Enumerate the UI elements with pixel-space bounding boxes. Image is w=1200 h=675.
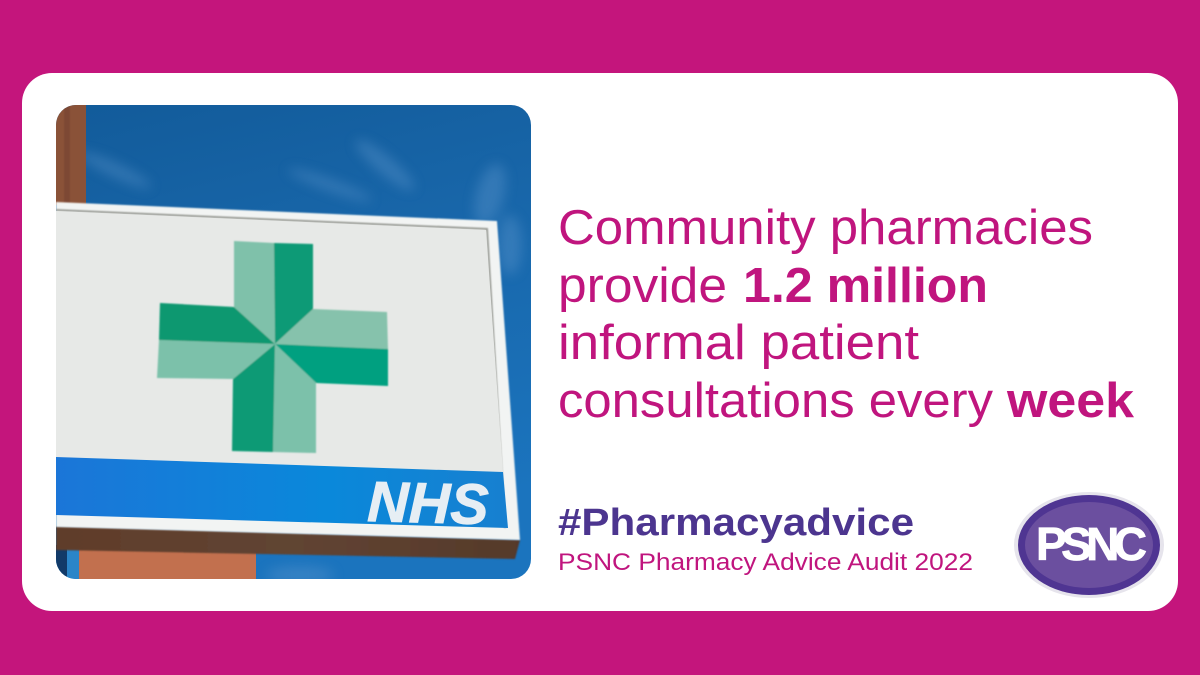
green cross <box>157 241 388 453</box>
headline: 1.2 million <box>743 259 988 313</box>
sign face <box>56 211 503 472</box>
brick wall top <box>56 105 86 205</box>
photo: NHS pharmacy sign <box>56 105 531 584</box>
headline <box>558 201 1135 428</box>
headline: week <box>1006 374 1135 428</box>
source line: PSNC Pharmacy Advice Audit 2022 <box>558 549 973 576</box>
headline: informal patient <box>558 316 919 370</box>
headline: provide <box>558 259 727 313</box>
sky <box>56 105 531 579</box>
sign underside <box>56 526 520 559</box>
lower left sky <box>56 550 79 579</box>
clouds <box>76 134 522 584</box>
blue NHS band <box>56 457 508 528</box>
PSNC logo <box>1014 492 1164 598</box>
frame inner edge <box>56 210 505 528</box>
sign frame <box>56 202 520 540</box>
brick wall bottom <box>79 550 256 579</box>
white card panel <box>22 73 1178 611</box>
NHS wordmark: NHS <box>367 470 489 537</box>
PSNC logo: PSNC <box>1036 518 1147 570</box>
headline: consultations every <box>558 374 994 428</box>
dark corner <box>56 545 67 577</box>
hashtag: #Pharmacyadvice <box>558 502 914 544</box>
headline: Community pharmacies <box>558 201 1093 255</box>
